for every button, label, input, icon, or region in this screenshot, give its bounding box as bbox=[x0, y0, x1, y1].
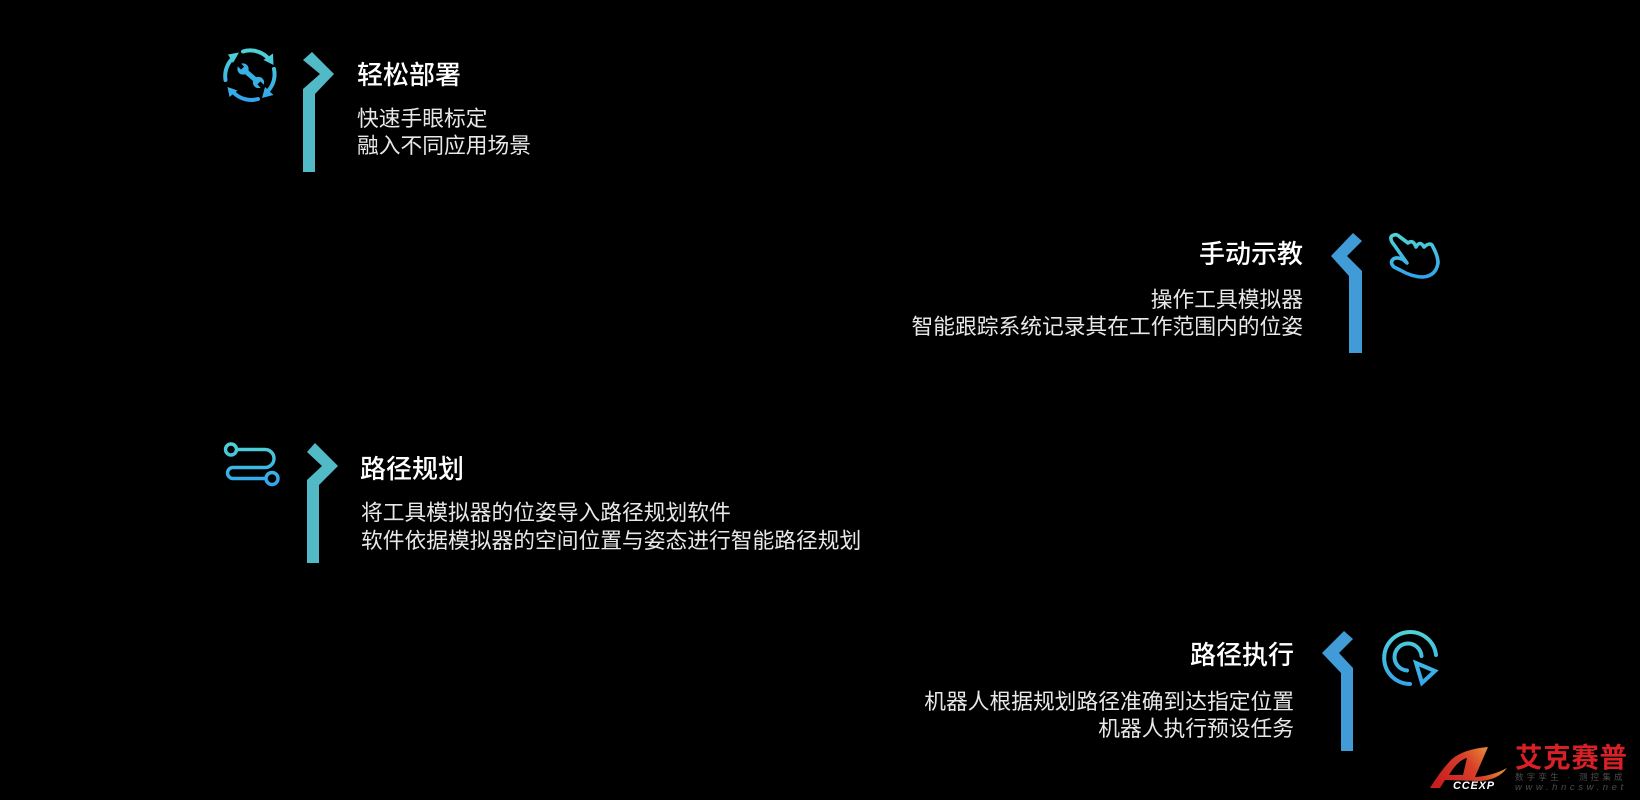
text block bbox=[924, 689, 1294, 741]
text block bbox=[361, 500, 861, 553]
heading: 路径规划 bbox=[360, 454, 464, 484]
panel: manual teaching bbox=[912, 233, 1438, 353]
panel: path execution bbox=[924, 631, 1436, 751]
text block: 软件依据模拟器的空间位置与姿态进行智能路径规划 bbox=[361, 528, 861, 553]
icon: wrench bbox=[237, 62, 265, 89]
text block: 机器人执行预设任务 bbox=[1098, 716, 1294, 741]
logo: ACCEXP bbox=[1430, 742, 1627, 793]
heading: 轻松部署 bbox=[357, 60, 461, 90]
logo name: 艾克赛普 bbox=[1515, 742, 1627, 773]
marker: teal arrow bar bbox=[307, 443, 338, 563]
text block: 智能跟踪系统记录其在工作范围内的位姿 bbox=[912, 314, 1303, 339]
heading: 手动示教 bbox=[1199, 239, 1303, 269]
marker: blue arrow bar bbox=[1331, 233, 1362, 353]
text block bbox=[912, 287, 1303, 339]
panel: path planning bbox=[226, 443, 861, 563]
heading: 路径执行 bbox=[1190, 640, 1294, 670]
icon: route path bbox=[226, 444, 278, 484]
logo acronym: CCEXP bbox=[1453, 780, 1495, 792]
logo mark bbox=[1430, 747, 1507, 788]
icon: target with cursor bbox=[1384, 632, 1436, 684]
text block: 机器人根据规划路径准确到达指定位置 bbox=[924, 689, 1294, 714]
marker: blue arrow bar bbox=[1322, 631, 1353, 751]
text block: 融入不同应用场景 bbox=[357, 133, 531, 158]
panel: easy deployment bbox=[225, 50, 531, 172]
text block: 快速手眼标定 bbox=[357, 106, 488, 131]
icon: rotating arrows with wrench bbox=[225, 50, 275, 100]
icon: pointing hand bbox=[1391, 235, 1438, 277]
marker: teal arrow bar bbox=[303, 52, 334, 172]
text block bbox=[357, 106, 531, 158]
text block: 将工具模拟器的位姿导入路径规划软件 bbox=[361, 500, 731, 525]
text block: 操作工具模拟器 bbox=[1151, 287, 1303, 312]
logo tagline: 数字孪生 · 测控集成 bbox=[1515, 772, 1626, 782]
logo url: www.hncsw.net bbox=[1515, 782, 1627, 793]
